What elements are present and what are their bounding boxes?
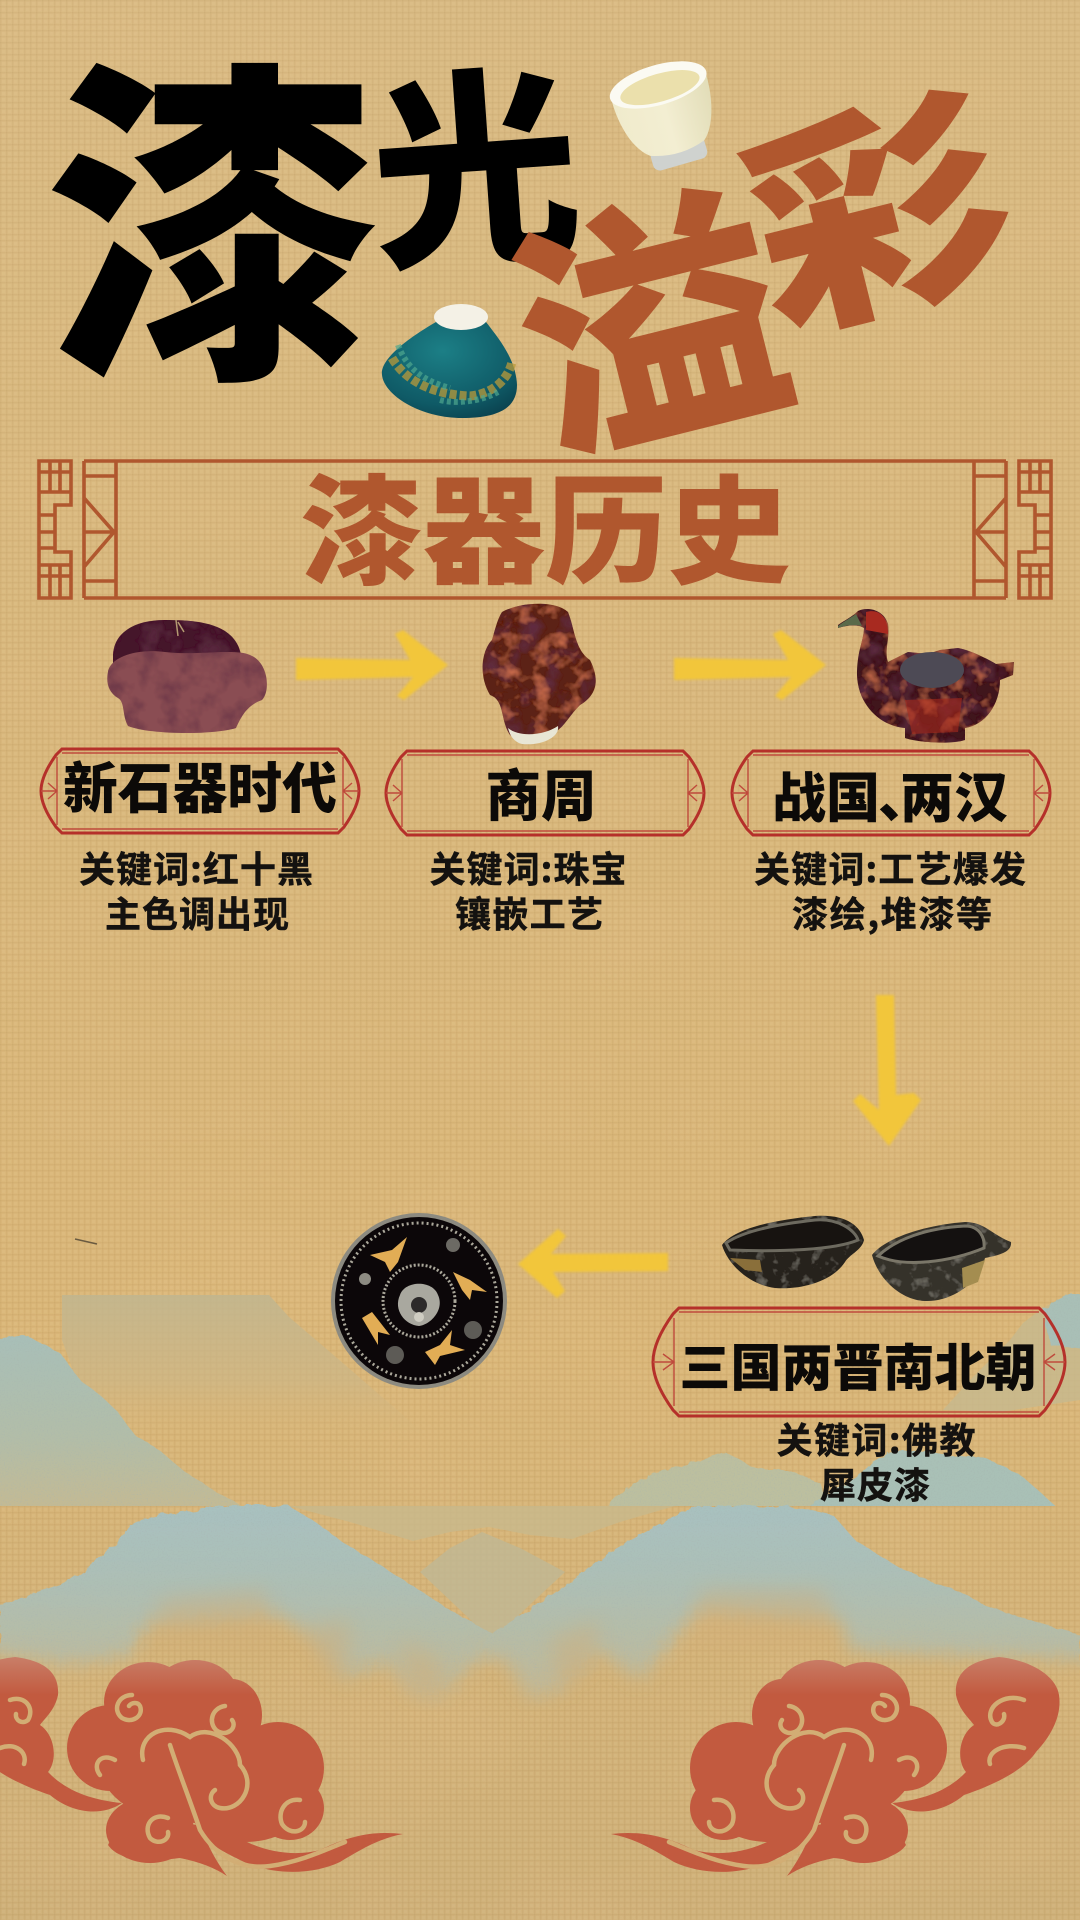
- icon: white porcelain cup: [605, 52, 729, 179]
- label: 新石器时代: 新石器时代: [63, 744, 337, 824]
- keywords: 商周: 镶嵌工艺: [455, 886, 603, 938]
- title: 彩: 彩: [710, 7, 1040, 388]
- label: 三国两晋南北朝: 三国两晋南北朝: [680, 1327, 1036, 1401]
- keywords: 三国两晋南北朝: 犀皮漆: [820, 1457, 930, 1509]
- label: 战国、两汉: 战国、两汉: [772, 754, 1008, 833]
- arrow: down: [853, 995, 921, 1146]
- icon: neolithic lacquer bowl: [107, 620, 267, 733]
- keywords: 三国两晋南北朝: 关键词:佛教: [776, 1412, 976, 1464]
- keywords: 新石器时代: [79, 841, 313, 938]
- mountains: upper range: [0, 1295, 1080, 1512]
- label: 商周: 商周: [486, 752, 596, 833]
- speck mark: [75, 1239, 97, 1244]
- keywords: 新石器时代: 主色调出现: [105, 886, 289, 938]
- heading: 漆器历史: 漆器历史: [300, 437, 790, 608]
- arrow: second yellow arrow: [674, 630, 826, 700]
- icon: teal lacquer bowl: [382, 304, 517, 418]
- icon: black lacquer dish with gold inlay: [331, 1213, 507, 1389]
- label: 战国、两汉: [732, 751, 1050, 835]
- icon: lacquer duck vessel: [838, 609, 1014, 743]
- mountains: lower range: [0, 1490, 1080, 1700]
- label: 三国两晋南北朝: [653, 1308, 1065, 1416]
- banner: 漆器历史 frame: [39, 461, 1051, 598]
- keywords: 商周: [430, 841, 626, 938]
- arrow: left: [518, 1229, 668, 1298]
- keywords: 三国两晋南北朝: [776, 1412, 976, 1509]
- icon: two dark lacquer ear cups: [722, 1216, 1011, 1301]
- keywords: 战国、两汉: 关键词:工艺爆发: [754, 841, 1026, 893]
- title: 光: 光: [360, 0, 588, 313]
- title: 溢: 溢: [474, 95, 820, 526]
- keywords: 战国、两汉: [754, 841, 1026, 938]
- cloud: right: [611, 1657, 1060, 1876]
- keywords: 商周: 关键词:珠宝: [430, 841, 626, 893]
- keywords: 新石器时代: 关键词:红十黑: [79, 841, 313, 893]
- icon: Shang Zhou inlaid lacquer: [483, 604, 596, 744]
- label: 商周: [386, 751, 704, 835]
- keywords: 战国、两汉: 漆绘,堆漆等: [792, 886, 992, 938]
- cloud: left: [0, 1657, 403, 1876]
- arrow: first yellow arrow: [296, 630, 448, 700]
